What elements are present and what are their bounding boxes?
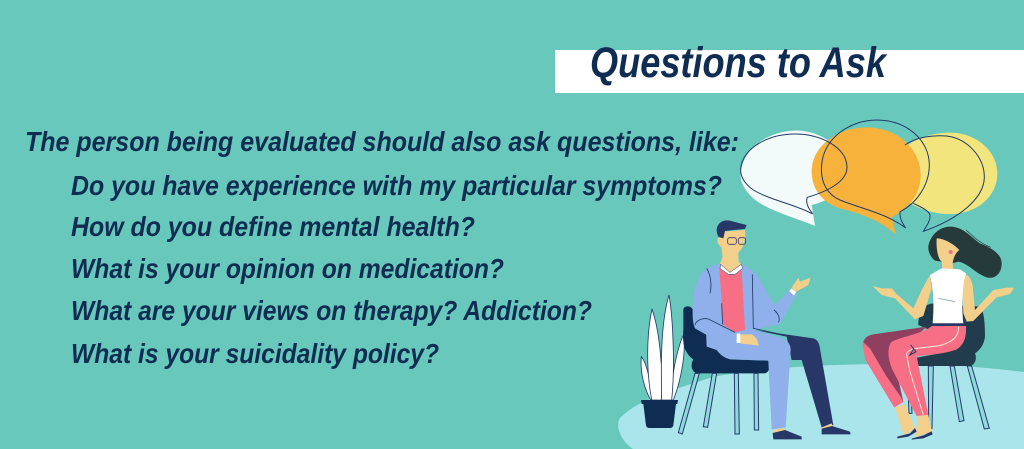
woman's far leg — [863, 327, 927, 407]
man: lower body and chair — [678, 306, 851, 439]
plant — [641, 295, 684, 428]
man's sweater — [719, 267, 745, 332]
woman's shoes — [897, 428, 933, 440]
woman's lower legs — [895, 404, 932, 437]
man's far sock and shoe — [822, 423, 833, 429]
bubble outlines — [741, 134, 847, 214]
man's jacket — [693, 263, 796, 345]
intro line: The person being evaluated should also ask questions, like: — [25, 126, 739, 157]
woman's pants stripe — [907, 327, 959, 415]
woman's arms — [873, 274, 1014, 322]
question 3: What is your opinion on medication? — [71, 253, 504, 284]
orange bubble — [812, 127, 921, 234]
title: Questions to Ask — [590, 39, 888, 87]
question 2: How do you define mental health? — [71, 211, 475, 242]
woman's cheek — [949, 250, 953, 254]
woman's top — [930, 268, 966, 323]
man: upper body — [693, 220, 811, 346]
title banner — [555, 39, 1024, 93]
question list — [25, 126, 739, 369]
question 5: What is your suicidality policy? — [71, 338, 439, 369]
jacket lines — [695, 268, 787, 336]
woman's top crease — [938, 298, 955, 302]
man's near leg — [706, 330, 791, 429]
man's near sock and shoe — [773, 428, 785, 433]
yellow bubble — [890, 133, 997, 214]
man's chair — [678, 306, 770, 434]
man's far leg — [755, 330, 833, 427]
speech bubbles — [741, 120, 997, 234]
woman's hair — [928, 227, 1002, 278]
woman's near leg — [888, 326, 966, 416]
woman's waistband — [932, 323, 964, 326]
floor ellipse — [618, 364, 1024, 449]
pot — [641, 400, 678, 428]
man's glasses — [728, 238, 746, 244]
man's far hand — [792, 278, 811, 292]
man's near cuff — [737, 334, 740, 343]
white bubble — [741, 131, 847, 226]
man's neck and face — [717, 230, 745, 272]
man's hair — [717, 220, 747, 238]
woman's flyaway strand — [966, 230, 991, 247]
woman's knee hand — [910, 345, 916, 355]
man's collar — [720, 264, 743, 274]
woman's chair — [908, 303, 989, 429]
question 4: What are your views on therapy? Addiction? — [71, 295, 592, 326]
woman: chair and lower body — [863, 303, 989, 440]
man's cuff — [789, 288, 796, 296]
woman: upper body — [873, 227, 1014, 326]
man's near hand — [740, 334, 759, 346]
woman's face and neck — [937, 238, 959, 277]
question 1: Do you have experience with my particular symptoms? — [71, 170, 722, 201]
